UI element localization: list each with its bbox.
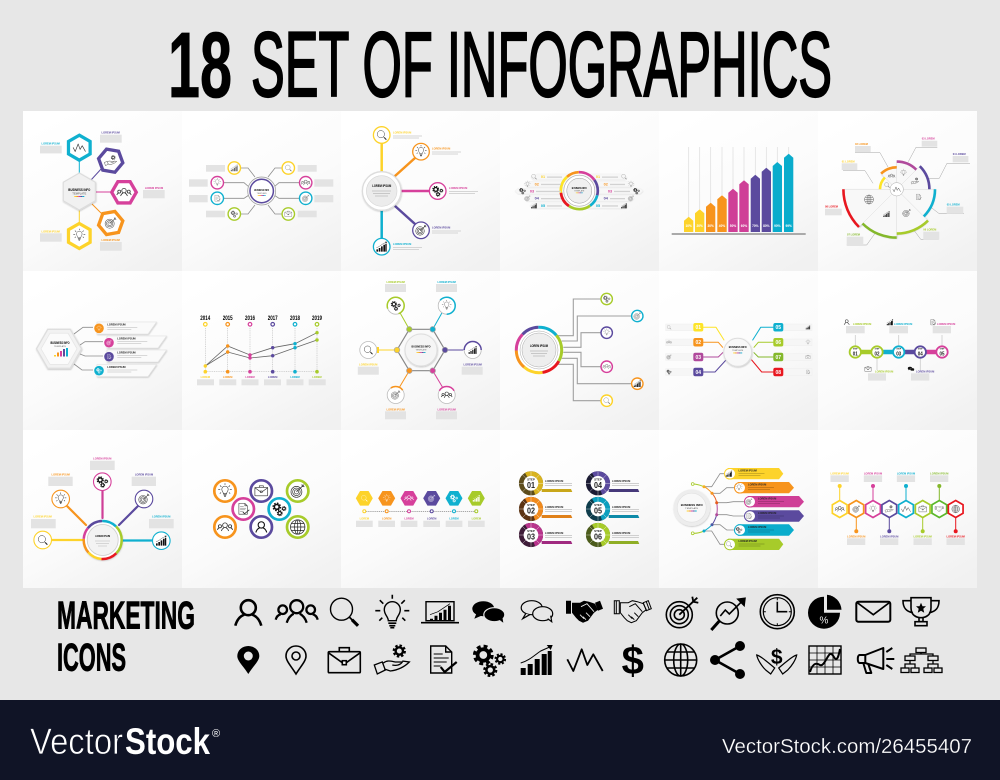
panel: step chain: 04 bbox=[918, 352, 924, 358]
panel: step chain: STEP bbox=[875, 348, 880, 350]
label: lorem ipsum right: LOREM IPSUM bbox=[145, 186, 163, 190]
panel: six step badges: STEP bbox=[527, 478, 535, 482]
heading: marketing icons: MARKETING bbox=[57, 595, 195, 638]
panel: step chain: 03 bbox=[896, 352, 901, 358]
panel: eight-node circle diagram bbox=[189, 162, 333, 220]
column labels bbox=[197, 375, 326, 385]
numbered badges bbox=[693, 323, 783, 376]
mini bar chart bbox=[54, 348, 68, 356]
numbered badges: 05 bbox=[776, 325, 781, 331]
banner text lines bbox=[536, 176, 630, 207]
label: lorem ipsum lower left: LOREM IPSUM bbox=[42, 229, 60, 233]
hexagon labels: LOREM IPSUM bbox=[831, 471, 849, 475]
column labels: LOREM bbox=[245, 375, 255, 379]
panel: hexagon with four banners: TEMPLATE bbox=[54, 345, 67, 348]
column labels: LOREM bbox=[312, 375, 322, 379]
hexagon labels: LOREM IPSUM bbox=[930, 471, 948, 475]
panel: six step badges: LOREM IPSUM bbox=[612, 479, 630, 483]
panel: step chain: STEP bbox=[940, 348, 945, 350]
panel: spiral pie sectors: 04 LOREM bbox=[953, 152, 966, 156]
timeline labels: LOREM bbox=[427, 516, 436, 520]
panel: hexagon with four banners: LOREM IPSUM bbox=[107, 365, 126, 369]
panel: arc with arrow banners: LOREM IPSUM bbox=[748, 525, 766, 529]
year labels: 2016 bbox=[245, 316, 255, 322]
step labels: LOREM IPSUM bbox=[916, 370, 934, 374]
node labels: LOREM IPSUM bbox=[438, 408, 456, 412]
panel: six step badges: 04 bbox=[594, 481, 602, 490]
node labels: LOREM IPSUM bbox=[152, 515, 170, 519]
title: 18 bbox=[168, 13, 232, 117]
panel: eight-step hub with numbered badges bbox=[666, 323, 812, 376]
node labels: LOREM IPSUM bbox=[387, 280, 405, 284]
bar percentage labels bbox=[686, 224, 792, 228]
panel: hexagon hub with six nodes: BUSINESS INFO bbox=[412, 344, 431, 348]
icon: hands with dollar bbox=[757, 646, 797, 674]
column labels: LOREM bbox=[290, 375, 300, 379]
bar percentage labels: 50% bbox=[730, 224, 736, 228]
year labels: 2017 bbox=[268, 316, 278, 322]
step labels: LOREM IPSUM bbox=[875, 370, 893, 374]
bar percentage labels: 70% bbox=[752, 224, 759, 228]
node labels: LOREM IPSUM bbox=[93, 456, 111, 460]
panel: ring with mirrored banners: BUSINESS INFO bbox=[572, 186, 587, 190]
year labels: 2018 bbox=[290, 316, 300, 322]
colored ring bbox=[516, 327, 562, 373]
panel: arc with arrow banners: LOREM IPSUM bbox=[748, 482, 766, 486]
ring segment gaps bbox=[518, 471, 610, 548]
hexagon labels: LOREM IPSUM bbox=[914, 535, 932, 539]
banner numbers: 02 bbox=[604, 182, 608, 186]
numbered badges: 07 bbox=[776, 355, 781, 361]
panel: eight-step hub with numbered badges: BUSINESS INFO bbox=[729, 345, 747, 349]
numbered badges: 01 bbox=[696, 325, 701, 331]
bar percentage labels: 80% bbox=[763, 224, 770, 228]
panel: six step badges: LOREM IPSUM bbox=[545, 505, 563, 509]
bar percentage labels: 60% bbox=[741, 224, 747, 228]
spoke labels: LOREM IPSUM bbox=[432, 226, 450, 230]
panel: six step badges bbox=[518, 471, 639, 548]
bar percentage labels: 90% bbox=[774, 224, 781, 228]
column labels: LOREM bbox=[268, 375, 277, 379]
banner numbers: 04 bbox=[604, 197, 609, 201]
panel: ring tree diagram bbox=[516, 293, 643, 406]
panel: step chain: STEP bbox=[853, 348, 858, 350]
year labels: 2014 bbox=[200, 316, 211, 322]
panel: six step badges: STEP bbox=[594, 529, 602, 533]
panel: six step badges: 05 bbox=[594, 507, 602, 516]
footer image id: VectorStock.com/26455407 bbox=[722, 736, 972, 758]
panel: eight-node circle diagram: TEMPLATE bbox=[257, 192, 268, 195]
banner numbers: 01 bbox=[596, 175, 600, 179]
panel: six step badges: 02 bbox=[527, 507, 535, 516]
bar percentage labels: 40% bbox=[719, 224, 725, 228]
banner numbers bbox=[530, 175, 612, 208]
title bbox=[168, 13, 832, 117]
panel: step chain bbox=[844, 319, 955, 381]
panel: spiral pie sectors: 03 LOREM bbox=[922, 136, 935, 140]
year labels: 2019 bbox=[312, 316, 322, 322]
panel: arc with arrow banners: TEMPLATE bbox=[685, 507, 699, 510]
panel: hexagon hub with six nodes: TEMPLATE bbox=[416, 348, 427, 352]
timeline labels: LOREM bbox=[449, 516, 459, 520]
panel: six step badges: LOREM IPSUM bbox=[545, 479, 563, 483]
panel: six step badges: LOREM IPSUM bbox=[545, 531, 563, 535]
panel: half-radial circle diagram bbox=[31, 456, 174, 560]
panel: step chain: 02 bbox=[874, 352, 880, 358]
panel: spiral pie sectors: 05 LOREM bbox=[947, 202, 960, 206]
ring bbox=[561, 172, 598, 209]
label: lorem ipsum top right: LOREM IPSUM bbox=[102, 131, 120, 135]
panel: hexagon radial infographic bbox=[40, 131, 165, 251]
panel: hexagon with four banners: LOREM IPSUM bbox=[107, 322, 126, 326]
footer logo bbox=[30, 721, 220, 762]
node labels bbox=[358, 280, 483, 419]
panel: spiral pie sectors: 01 LOREM bbox=[842, 159, 855, 163]
spoke labels: LOREM IPSUM bbox=[393, 242, 411, 246]
bar percentage labels: 20% bbox=[697, 224, 703, 228]
icon row: bottom bbox=[237, 639, 942, 683]
panel: eight-node circle diagram: BUSINESS INFO bbox=[254, 188, 269, 192]
step labels: LOREM IPSUM bbox=[853, 322, 871, 326]
timeline labels: LOREM bbox=[404, 516, 414, 520]
year labels: 2015 bbox=[223, 316, 233, 322]
panel: arc with arrow banners: LOREM IPSUM bbox=[738, 468, 757, 472]
panel: hexagon radial infographic: BUSINESS INFO bbox=[68, 188, 90, 192]
heading: marketing icons bbox=[57, 595, 195, 680]
node labels: LOREM IPSUM bbox=[387, 408, 405, 412]
panel: six step badges: STEP bbox=[594, 503, 602, 507]
panel: hexagon with four banners: LOREM IPSUM bbox=[117, 336, 136, 340]
panel: arrow bar chart bbox=[672, 147, 806, 235]
hexagon labels bbox=[830, 471, 965, 545]
node labels: LOREM IPSUM bbox=[135, 472, 153, 476]
panel: infographic grid background bbox=[23, 111, 977, 588]
panel: step chain: STEP bbox=[918, 348, 923, 350]
panel: arc with arrow banners: LOREM IPSUM bbox=[738, 539, 757, 543]
panel: arc with arrow banners: BUSINESS INFO bbox=[681, 503, 703, 507]
panel: spiral pie sectors: 07 LOREM bbox=[847, 232, 860, 236]
year labels bbox=[200, 316, 322, 322]
node labels: LOREM IPSUM bbox=[34, 515, 52, 519]
banner numbers: 03 bbox=[608, 189, 612, 193]
timeline labels: LOREM bbox=[472, 516, 481, 520]
node labels: LOREM IPSUM bbox=[52, 472, 70, 476]
heading: marketing icons: ICONS bbox=[57, 637, 126, 680]
banner numbers: 05 bbox=[541, 204, 545, 208]
panel: hexagon chain timeline bbox=[830, 471, 965, 545]
panel: radial circle diagram with five spokes: LOREM IPSUM bbox=[372, 184, 391, 188]
icon: pie chart bbox=[808, 595, 842, 629]
icon: pie chart: % bbox=[820, 616, 829, 627]
panel: eight-step hub with numbered badges: TEMPLATE bbox=[732, 349, 744, 352]
panel: spiral pie sectors: 08 LOREM bbox=[825, 204, 838, 208]
hexagon labels: LOREM IPSUM bbox=[864, 471, 882, 475]
timeline labels: LOREM bbox=[360, 516, 369, 520]
banner numbers: 01 bbox=[541, 175, 545, 179]
panel: hexagon radial infographic: TEMPLATE bbox=[72, 192, 87, 196]
footer logo: Vector bbox=[30, 721, 123, 762]
numbered badges: 02 bbox=[696, 340, 701, 346]
panel: six step badges: LOREM IPSUM bbox=[612, 531, 630, 535]
banner numbers: 03 bbox=[530, 189, 534, 193]
panel: step chain: 01 bbox=[853, 352, 858, 358]
banner numbers: 02 bbox=[535, 182, 539, 186]
panel: six step badges: STEP bbox=[527, 503, 535, 507]
panel: timeline line chart 2014 to 2019 bbox=[197, 316, 326, 385]
panel: arc with arrow banners bbox=[673, 468, 804, 550]
panel: hexagon hub with six nodes bbox=[358, 280, 483, 419]
arrow banners bbox=[728, 468, 804, 550]
panel: spiral pie sectors bbox=[825, 136, 970, 245]
panel: spiral pie sectors: 02 LOREM bbox=[855, 142, 868, 146]
spoke labels: LOREM IPSUM bbox=[432, 146, 450, 150]
text placeholder blocks bbox=[189, 165, 333, 217]
panel: hexagon timeline bbox=[354, 487, 487, 527]
hexagon labels: LOREM IPSUM bbox=[947, 535, 965, 539]
panel: ring tree diagram: LOREM IPSUM bbox=[530, 344, 548, 348]
panel: half-radial circle diagram: LOREM IPSUM bbox=[95, 534, 111, 538]
panel: interlocking icon circles bbox=[214, 480, 308, 538]
panel: six step badges: STEP bbox=[594, 478, 602, 482]
timeline labels: LOREM bbox=[382, 516, 391, 520]
panel: hexagon with four banners bbox=[31, 320, 167, 378]
node labels: LOREM IPSUM bbox=[438, 280, 456, 284]
bar percentage labels: 99% bbox=[786, 224, 792, 228]
hexagon labels: LOREM IPSUM bbox=[897, 471, 915, 475]
panel: six step badges: 03 bbox=[527, 533, 535, 542]
step labels bbox=[846, 322, 955, 381]
column labels: LOREM bbox=[223, 375, 232, 379]
bar percentage labels: 30% bbox=[708, 224, 714, 228]
label: lorem ipsum lower right: LOREM IPSUM bbox=[102, 238, 120, 242]
spoke labels bbox=[393, 130, 478, 250]
bar percentage labels: 10% bbox=[686, 224, 692, 228]
panel: arc with arrow banners: LOREM IPSUM bbox=[758, 511, 776, 515]
footer logo: Stock bbox=[125, 721, 210, 762]
panel: six step badges: STEP bbox=[527, 529, 535, 533]
dotted arc bbox=[691, 483, 718, 535]
panel: spiral pie sectors: 06 LOREM bbox=[923, 228, 936, 232]
numbered badges: 04 bbox=[696, 370, 701, 376]
panel: ring with mirrored banners bbox=[515, 172, 643, 209]
panel: ring with mirrored banners: TEMPLATE bbox=[574, 190, 585, 193]
panel: step chain: STEP bbox=[896, 348, 902, 350]
panel: six step badges: 06 bbox=[594, 533, 602, 542]
icon row: top bbox=[235, 595, 939, 630]
panel: six step badges: 01 bbox=[527, 481, 535, 490]
banner numbers: 05 bbox=[596, 204, 600, 208]
step labels: LOREM IPSUM bbox=[894, 322, 912, 326]
icon: hands with dollar: $ bbox=[771, 646, 783, 669]
timeline labels bbox=[356, 516, 485, 527]
panel: arc with arrow banners: LOREM IPSUM bbox=[758, 496, 776, 500]
banner numbers: 04 bbox=[535, 197, 540, 201]
panel: hexagon with four banners: BUSINESS INFO bbox=[50, 341, 70, 345]
step underline bars bbox=[542, 489, 639, 544]
hexagon labels: LOREM IPSUM bbox=[880, 535, 898, 539]
column labels: LOREM bbox=[201, 375, 210, 379]
footer logo: ® bbox=[212, 728, 220, 740]
panel: six step badges: LOREM IPSUM bbox=[612, 505, 630, 509]
node labels: LOREM IPSUM bbox=[464, 362, 482, 366]
node labels bbox=[31, 456, 174, 528]
spoke labels: LOREM IPSUM bbox=[449, 186, 467, 190]
numbered badges: 08 bbox=[776, 370, 781, 376]
step labels: LOREM IPSUM bbox=[937, 322, 955, 326]
hexagon labels: LOREM IPSUM bbox=[847, 535, 865, 539]
label: lorem ipsum left top: LOREM IPSUM bbox=[42, 142, 60, 146]
panel: step chain: 05 bbox=[940, 352, 944, 358]
node labels: LOREM IPSUM bbox=[359, 362, 377, 366]
panel: hexagon with four banners: LOREM IPSUM bbox=[117, 350, 136, 354]
numbered badges: 06 bbox=[776, 340, 781, 346]
numbered badges: 03 bbox=[696, 355, 701, 361]
footer bar bbox=[0, 700, 1000, 780]
spoke labels: LOREM IPSUM bbox=[393, 130, 411, 134]
icon: dollar: $ bbox=[622, 639, 644, 683]
sector labels bbox=[825, 141, 968, 245]
panel: radial circle diagram with five spokes bbox=[362, 127, 478, 255]
